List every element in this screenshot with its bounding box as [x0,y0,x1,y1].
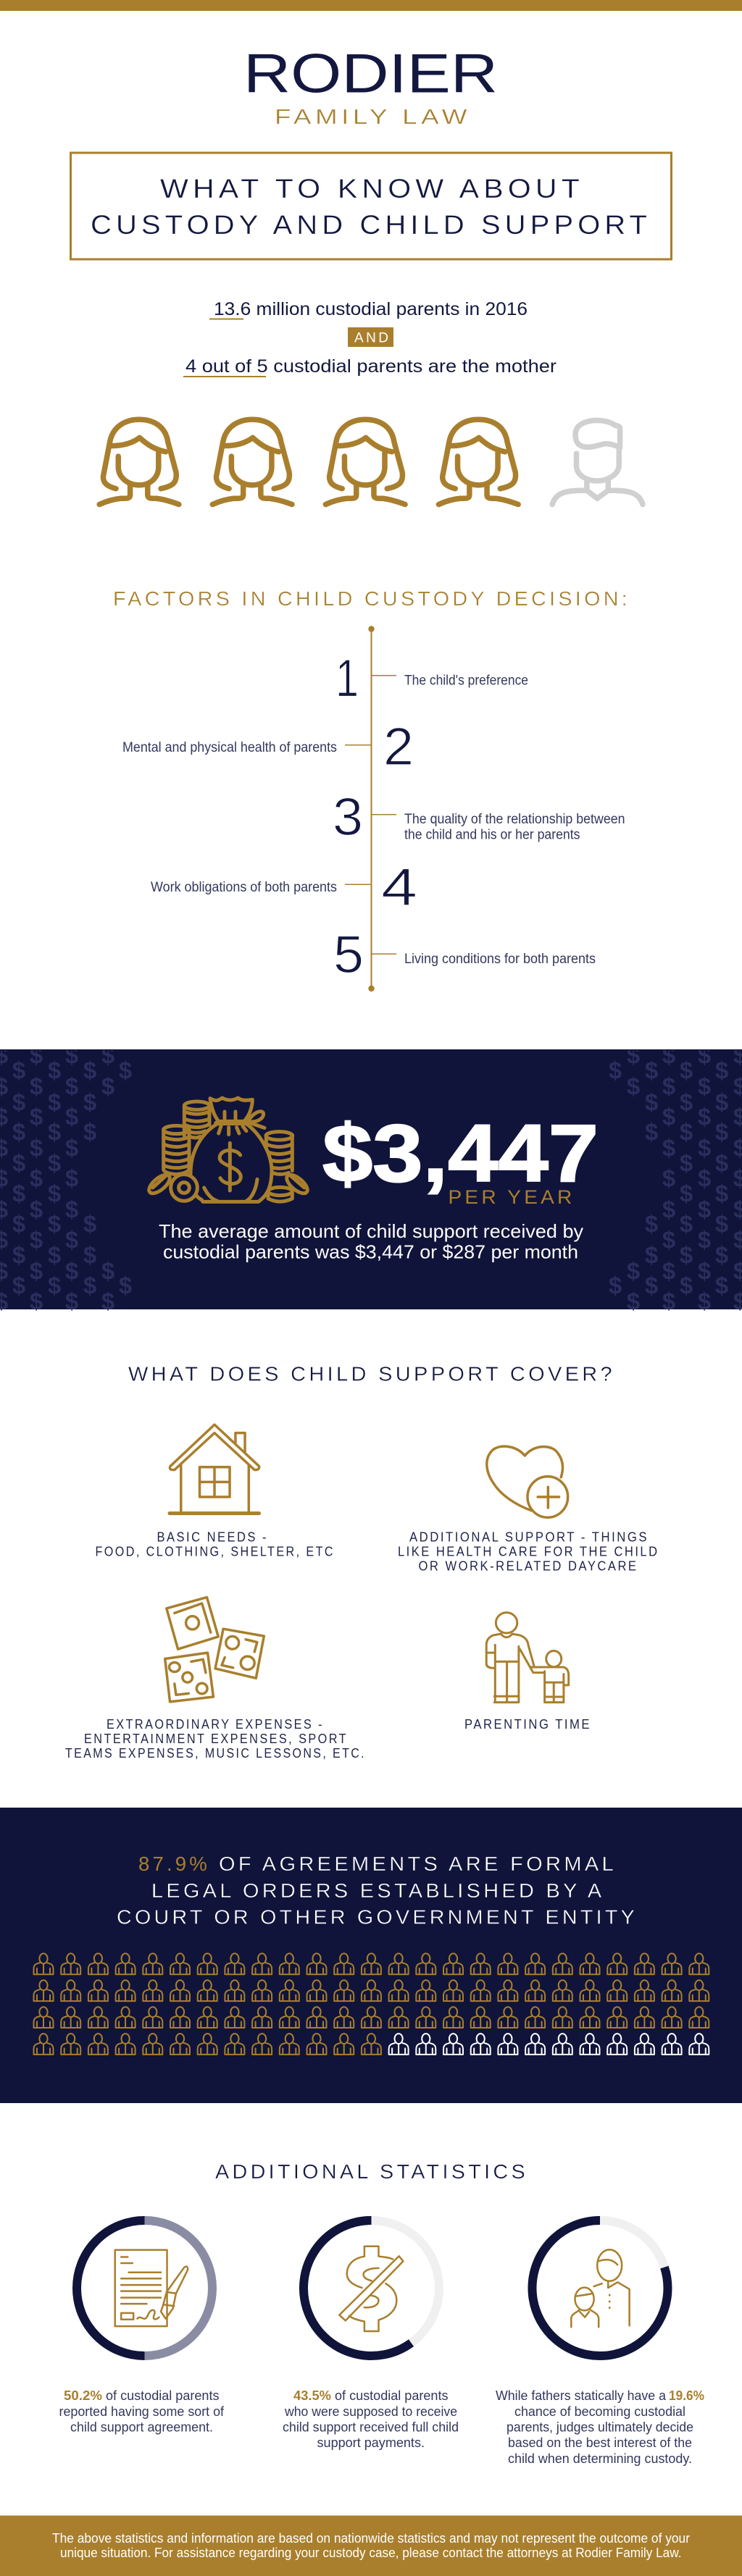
icons: four mothers and one father [99,419,643,505]
icon: signed document [115,2250,188,2326]
factor 3: the child and his or her parents [404,827,580,843]
panel: average child support: $$$$$$ [645,1057,658,1299]
description [159,1220,583,1263]
factor 4: Work obligations of both parents [151,880,337,895]
item: additional support: LIKE HEALTH CARE FOR THE CHILD [398,1544,659,1558]
item: basic needs [96,1425,335,1558]
panel: average child support: $$ [119,1057,132,1299]
panel: average child support: $$$$$$$$$ [65,1041,78,1315]
timeline of custody factors [122,626,625,991]
panel: average child support: $$ [609,1057,622,1299]
stat: 19.6 percent: parents, judges ultimately decide [507,2419,693,2435]
logo: Rodier Family Law: FAMILY LAW [275,106,471,129]
stat: 43.5 percent: child support received full child [283,2419,459,2435]
item: parenting time [464,1613,591,1732]
factor 3: 3 [333,788,363,847]
factor 4: 4 [381,858,417,917]
item: extraordinary expenses: EXTRAORDINARY EXPENSES - [107,1717,324,1732]
stat: 19.6 percent [496,2220,704,2466]
stat: 19.6 percent: While fathers statically have a [496,2388,667,2403]
item: extraordinary expenses: TEAMS EXPENSES, MUSIC LESSONS, ETC. [65,1746,366,1761]
factor 1: The child's preference [404,674,528,688]
heading: additional statistics: ADDITIONAL STATISTICS [215,2160,528,2183]
stat: 50.2 percent [59,2220,225,2435]
stat: 43.5 percent: 43.5% [293,2388,331,2403]
description: The average amount of child support received by [159,1220,583,1242]
factor 5 [333,926,596,984]
stat: 50.2 percent: of custodial parents [106,2388,219,2403]
icon: parent with child [571,2249,630,2327]
panel: average child support: $$$$$$$$ [715,1057,728,1299]
icon: dice [165,1598,264,1702]
stat: 19.6 percent: based on the best interest of the [508,2435,692,2450]
title box: WHAT TO KNOW ABOUT [160,174,584,204]
item: extraordinary expenses: ENTERTAINMENT EXPENSES, SPORT [84,1732,348,1746]
headline stats: AND [354,330,388,346]
factor 2 [122,718,414,776]
stat: 50.2 percent: reported having some sort of [59,2404,225,2419]
item: additional support [398,1446,659,1573]
icon: parent and child [486,1613,569,1703]
item: additional support: OR WORK-RELATED DAYCARE [419,1558,638,1573]
ring chart [532,2220,668,2356]
panel: average child support: $$$$$$$$$ [30,1041,43,1315]
stat: 50.2 percent: 50.2% [64,2388,102,2403]
factor 1 [335,649,528,708]
footer disclaimer: unique situation. For assistance regarding your custody case, please contact the attorneys at Rodier Family Law. [60,2545,681,2560]
icon: house [170,1425,259,1514]
factor 2: Mental and physical health of parents [122,740,337,755]
pictogram: 87.9 of 100 people [33,1953,709,2055]
top gold bar [0,0,742,11]
logo: Rodier Family Law [243,43,498,129]
stat: 50.2 percent: child support agreement. [70,2419,213,2435]
item: parenting time: PARENTING TIME [464,1717,591,1732]
big number: $3,447 [322,1108,599,1199]
footer disclaimer [0,2516,742,2576]
headline stats: 13.6 million custodial parents in 2016 [214,299,528,319]
factor 4 [151,858,417,917]
headline stats: 4 out of 5 custodial parents are the mother [186,356,556,377]
panel: average child support: $$$$ [627,1041,640,1315]
item: basic needs: BASIC NEEDS - [157,1530,268,1544]
heading: factors: FACTORS IN CHILD CUSTODY DECISION: [113,587,630,610]
description: custodial parents was $3,447 or $287 per month [163,1241,578,1263]
factor 3 [333,788,625,847]
logo: Rodier Family Law: RODIER [243,43,498,104]
statistic text: OF AGREEMENTS ARE FORMAL [219,1853,617,1875]
icon: heart with plus [487,1446,568,1517]
statistic text [117,1853,638,1928]
panel: formal agreements [0,1808,742,2103]
panel: average child support: $$$$$$$$ [48,1057,61,1299]
stat: 19.6 percent: 19.6% [669,2388,704,2403]
title box [71,153,671,259]
panel: average child support: $$$$ [101,1041,114,1315]
panel: average child support: $$$$$$$$ [680,1057,693,1299]
panel: average child support: $$$$$$ [83,1057,96,1299]
item: additional support: ADDITIONAL SUPPORT - THINGS [409,1530,649,1544]
panel: average child support: $$$$$$$$ [12,1057,25,1299]
item: extraordinary expenses [65,1598,366,1761]
statistic text: COURT OR OTHER GOVERNMENT ENTITY [117,1906,638,1928]
stat: 43.5 percent: who were supposed to receive [284,2404,457,2419]
per year label: PER YEAR [448,1186,575,1208]
stat: 19.6 percent: child when determining custody. [508,2451,692,2466]
panel: average child support [0,1041,742,1315]
panel: average child support: $$$$$$$$$ [662,1041,675,1315]
icon: money bag with coins [146,1098,310,1201]
panel: average child support: $$$$$$$$$ [698,1041,711,1315]
factor 2: 2 [383,718,414,776]
stat: 43.5 percent [283,2220,459,2450]
item: basic needs: FOOD, CLOTHING, SHELTER, ETC [96,1544,335,1558]
ring chart [77,2220,212,2356]
footer disclaimer: The above statistics and information are based on nationwide statistics and may not represent the outcome of your [52,2530,690,2546]
title box: CUSTODY AND CHILD SUPPORT [91,210,651,240]
stat: 19.6 percent: chance of becoming custodial [514,2404,685,2419]
factor 5: 5 [333,926,364,984]
stat: 43.5 percent: support payments. [317,2435,425,2450]
factor 1: 1 [335,649,359,708]
factor 3: The quality of the relationship between [404,812,625,827]
stat: 43.5 percent: of custodial parents [335,2388,448,2403]
statistic text: LEGAL ORDERS ESTABLISHED BY A [151,1879,604,1902]
heading: what does child support cover: WHAT DOES CHILD SUPPORT COVER? [128,1363,615,1385]
headline stats [183,299,556,377]
icon: crossed dollar sign [339,2246,403,2331]
factor 5: Living conditions for both parents [404,952,596,967]
ring chart [304,2220,439,2356]
statistic text: 87.9% [138,1853,210,1875]
